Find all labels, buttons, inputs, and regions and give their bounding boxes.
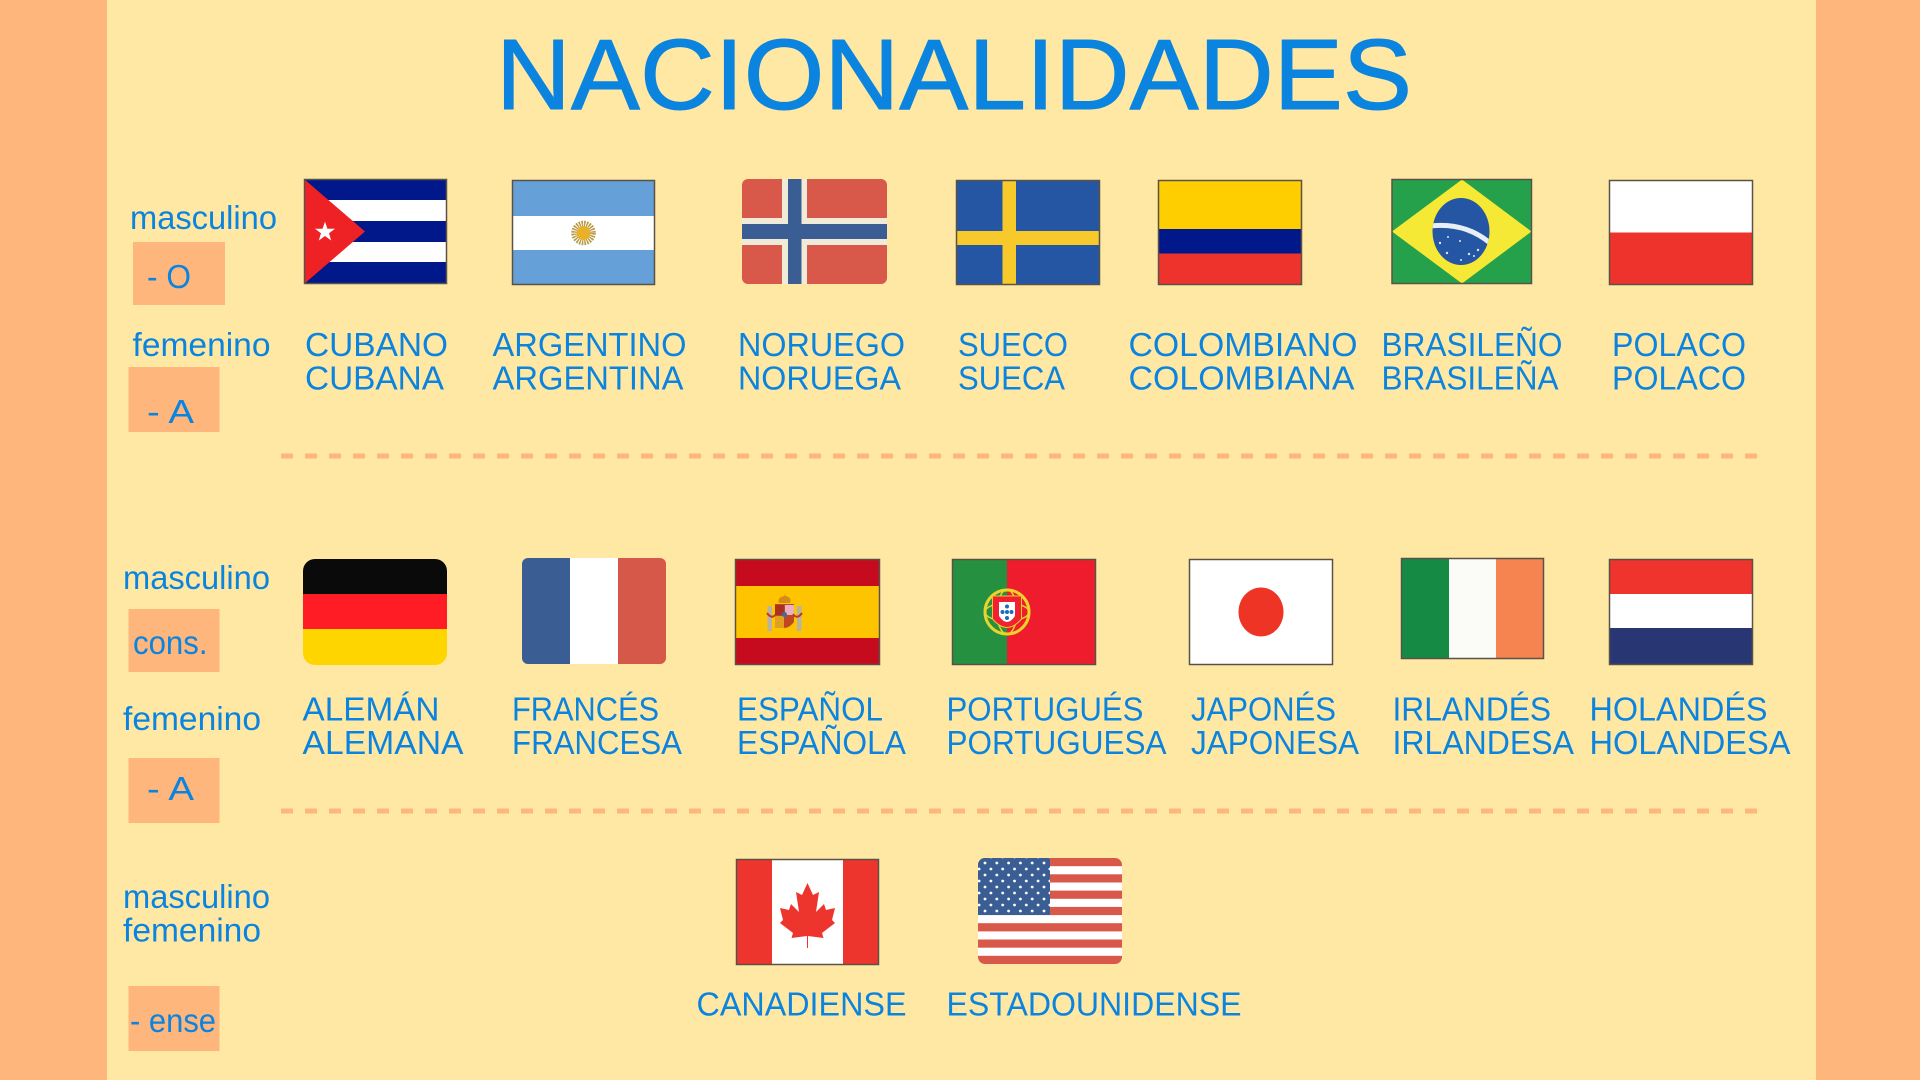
name: portugués portuguesa: PORTUGUESA — [946, 724, 1166, 761]
name: brasileño brasileña: BRASILEÑO — [1382, 326, 1562, 363]
name: español española — [737, 690, 906, 761]
flag: United States — [978, 858, 1122, 964]
name: sueco sueca: SUECO — [958, 326, 1068, 363]
name: alemán alemana: ALEMANA — [302, 724, 464, 761]
name: francés francesa — [512, 690, 682, 761]
name: cubano cubana — [305, 326, 448, 396]
name: español española: ESPAÑOL — [737, 690, 883, 728]
title: NACIONALIDADES — [496, 19, 1412, 131]
name: portugués portuguesa — [946, 690, 1166, 761]
ending box: -O: - O — [147, 258, 191, 295]
flag: Japan — [1189, 559, 1333, 665]
name: polaco polaco — [1612, 326, 1746, 396]
flag: Cuba — [304, 179, 447, 284]
flag: Canada — [736, 859, 879, 965]
ending box: consonant — [128, 609, 220, 672]
name: japonés japonesa — [1191, 690, 1359, 761]
name: sueco sueca: SUECA — [958, 360, 1065, 396]
ending box: -A: - A — [147, 770, 194, 807]
flag: Spain — [735, 559, 880, 665]
ending box: -O — [133, 242, 225, 305]
left side band — [0, 0, 107, 1080]
flag: Poland — [1609, 180, 1753, 285]
right side band — [1816, 0, 1920, 1080]
flag: Argentina — [512, 180, 655, 285]
label: femenino: femenino — [123, 700, 261, 737]
name: irlandés irlandesa — [1392, 690, 1574, 761]
name: francés francesa: FRANCESA — [512, 724, 682, 761]
name: noruego noruega: NORUEGO — [738, 326, 905, 363]
panel: adjectives ending in -ense — [123, 858, 1242, 1051]
label: masculino femenino: masculino — [123, 878, 270, 915]
ending box: -A: - A — [147, 393, 194, 430]
name: cubano cubana: CUBANA — [305, 360, 444, 396]
flag: Germany — [303, 559, 447, 665]
name: español española: ESPAÑOLA — [737, 724, 906, 761]
name: holandés holandesa: HOLANDESA — [1590, 724, 1790, 761]
ending box: -ense — [128, 986, 220, 1051]
flag: Colombia — [1158, 180, 1302, 285]
label: femenino: femenino — [132, 326, 270, 363]
name: argentino argentina: ARGENTINA — [492, 360, 684, 396]
name: estadounidense: ESTADOUNIDENSE — [946, 986, 1242, 1022]
name: brasileño brasileña: BRASILEÑA — [1382, 360, 1558, 396]
name: colombiano colombiana: COLOMBIANA — [1128, 360, 1354, 396]
name: irlandés irlandesa: IRLANDESA — [1392, 724, 1574, 761]
name: polaco polaco: POLACO — [1612, 360, 1746, 396]
label: masculino femenino: femenino — [123, 912, 261, 948]
name: francés francesa: FRANCÉS — [512, 690, 659, 728]
name: colombiano colombiana — [1128, 326, 1358, 396]
name: noruego noruega — [738, 326, 905, 396]
ending box: consonant: cons. — [133, 624, 208, 661]
label: masculino femenino — [123, 878, 270, 948]
name: brasileño brasileña — [1382, 326, 1562, 396]
name: argentino argentina: ARGENTINO — [492, 326, 686, 363]
ending box: -A — [128, 758, 220, 823]
flag: France — [522, 558, 666, 664]
flag: Ireland — [1401, 558, 1544, 659]
flag: Sweden — [956, 180, 1100, 285]
panel: adjectives ending in -o / -a — [128, 179, 1753, 432]
name: holandés holandesa — [1590, 690, 1790, 761]
ending box: -ense: - ense — [130, 1002, 216, 1039]
name: noruego noruega: NORUEGA — [738, 360, 901, 396]
name: alemán alemana — [302, 690, 464, 761]
panel: adjectives ending in consonant — [123, 558, 1790, 823]
name: irlandés irlandesa: IRLANDÉS — [1392, 690, 1551, 728]
label: masculino: masculino — [123, 559, 270, 596]
name: portugués portuguesa: PORTUGUÉS — [946, 690, 1144, 728]
flag: Norway — [742, 179, 887, 284]
name: japonés japonesa: JAPONESA — [1191, 724, 1359, 761]
name: holandés holandesa: HOLANDÉS — [1590, 690, 1768, 728]
flag: Brazil — [1392, 179, 1532, 284]
name: sueco sueca — [958, 326, 1068, 396]
name: cubano cubana: CUBANO — [305, 326, 448, 363]
name: argentino argentina — [492, 326, 686, 396]
name: japonés japonesa: JAPONÉS — [1191, 690, 1336, 728]
name: polaco polaco: POLACO — [1612, 326, 1746, 363]
label: masculino: masculino — [130, 199, 277, 236]
flag: Netherlands — [1609, 559, 1753, 665]
name: canadiense: CANADIENSE — [696, 986, 906, 1022]
name: colombiano colombiana: COLOMBIANO — [1128, 326, 1358, 363]
ending box: -A — [128, 367, 220, 432]
name: alemán alemana: ALEMÁN — [302, 690, 440, 728]
flag: Portugal — [952, 559, 1096, 665]
